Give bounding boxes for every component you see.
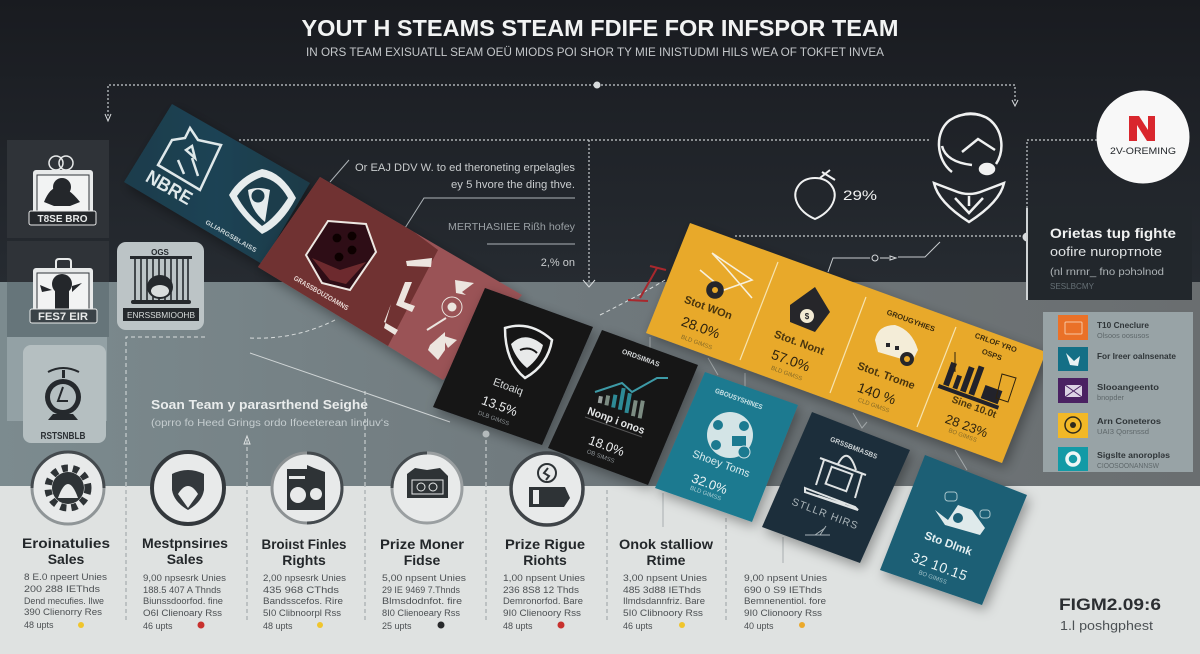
revenue column five: [503, 453, 586, 631]
card: red: GRASSBOUZOAMNS: [292, 275, 350, 312]
revenue column four: 29 IE 9469 7.Thnds: [382, 585, 460, 595]
card link lines: [650, 337, 967, 563]
revenue column seven: [744, 573, 828, 631]
revenue column six: Ilmdsdannfriz. Bare: [623, 596, 705, 606]
legend item two: [1058, 347, 1176, 371]
revenue column six: 3,00 npsent Unies: [623, 573, 708, 583]
revenue column five: Demronorfod. Bare: [503, 596, 583, 606]
card: black two: [548, 330, 698, 485]
revenue column four: 25 upts: [382, 621, 412, 631]
revenue column three: [262, 453, 347, 631]
revenue column one: [22, 452, 110, 630]
panel: left icon column: [7, 140, 204, 443]
revenue column two: Mestpnsirıes: [142, 535, 228, 551]
panel: icon tile three: RSTSNBLB: [40, 431, 86, 442]
icon: house money: $: [805, 312, 810, 321]
card: yellow: [646, 223, 1046, 463]
callout text block: [330, 160, 576, 269]
panel: icon tile one: [7, 140, 109, 238]
panel: right callout: [1026, 208, 1192, 300]
card: black two: ORDSIMIAS: [621, 349, 661, 369]
icon: house money: [790, 287, 830, 332]
legend item three: [1058, 378, 1159, 403]
revenue column four: Blmsdodnfot. fire: [382, 596, 462, 606]
card: teal two: Sto Dlmk: [923, 530, 974, 559]
total figure: [1059, 596, 1161, 633]
revenue column five: Riohts: [523, 552, 567, 568]
icon: mask: [934, 183, 1004, 222]
card: teal two: 32 10.15: [909, 549, 970, 584]
callout text block: Or EAJ DDV W. to ed theroneting erpelagles: [355, 162, 575, 174]
revenue column two: [142, 452, 228, 631]
legend item one: Olsoos oosusos: [1097, 333, 1150, 340]
revenue column six: 5I0 Clibnoory Rss: [623, 608, 704, 618]
icon: dragon shield: [505, 326, 552, 378]
card: black two: Nonp i onos: [586, 405, 646, 437]
panel: icon tile one: T8SE BRO: [38, 214, 88, 225]
card: teal two: [880, 455, 1027, 605]
card: blue: [124, 104, 310, 264]
node dot: [482, 430, 490, 438]
card: black one: [433, 288, 593, 445]
panel: right callout: Orietas tup fighte: [1050, 225, 1176, 241]
revenue column two: 46 upts: [143, 621, 173, 631]
revenue column six: [619, 536, 713, 631]
card: navy: GRSSBMIASBS: [829, 436, 878, 461]
icon: speakers: [272, 453, 342, 523]
icon: small head with percent: [795, 170, 877, 219]
revenue column one: 8 E.0 npeert Unies: [24, 572, 108, 582]
card: yellow: BLD GIMSS: [680, 335, 713, 351]
red arrow: [628, 266, 666, 301]
legend item four: Arn Coneteros: [1097, 416, 1161, 426]
section heading: (oprro fo Heed Grings ordo Ifoeeterean Iinduvʻs: [151, 417, 389, 429]
icon: crest: [158, 128, 221, 190]
callout text block: MERTHASIIEE Rißh hofey: [448, 221, 576, 233]
legend item three: Slooangeento: [1097, 382, 1159, 392]
icon: coin and wallet: [511, 453, 583, 525]
icon: headset helmet: [939, 114, 1001, 174]
revenue column three: Rights: [282, 552, 326, 568]
connector node: [872, 255, 896, 261]
card: yellow: BLD GIMSS: [770, 366, 803, 382]
revenue column five: 9I0 Clienoory Rss: [503, 608, 582, 618]
card: yellow: CLD GIMSS: [857, 398, 890, 415]
icon: shield: [152, 452, 224, 524]
legend item four: UAI3 Qorsnssd: [1097, 429, 1149, 436]
card: yellow: Stot. Nont: [772, 329, 826, 358]
card: yellow: Stot WOn: [682, 294, 734, 322]
card: navy: [762, 412, 910, 563]
revenue column five: Prize Rigue: [505, 536, 585, 552]
revenue column three: 48 upts: [263, 621, 293, 631]
logo badge: 2V-OREMING: [1110, 146, 1176, 157]
legend item four: [1058, 413, 1161, 438]
revenue column four: Fidse: [404, 552, 440, 568]
revenue column six: Onok stalliow: [619, 536, 713, 552]
panel: legend: [1043, 312, 1193, 472]
revenue column four: Prize Moner: [380, 536, 465, 552]
card: teal: BLD GIMSS: [689, 486, 722, 502]
icon: machine: [392, 453, 462, 523]
card: teal: 32.0%: [690, 470, 730, 497]
card: navy: STLLR HIRS: [790, 496, 860, 532]
legend item one: T10 Cneclure: [1097, 320, 1149, 330]
icon: vault building: [805, 456, 866, 510]
glyph marks: [384, 258, 474, 360]
card: black one: DLB GIMSS: [477, 411, 510, 427]
revenue column four: [380, 453, 467, 631]
panel: icon tile two: FES7 EIR: [38, 311, 88, 323]
card: yellow: 140 %: [855, 379, 898, 408]
revenue column five: 1,00 npsent Unies: [503, 573, 586, 583]
panel: cage tile: ENRSSBMIOOHB: [127, 310, 195, 320]
callout text block: 2,% on: [541, 257, 575, 269]
revenue column two: 188.5 407 A Thnds: [143, 585, 222, 595]
card: blue: GLIARGSBLAISS: [204, 219, 258, 255]
card: yellow: 28 23%: [943, 411, 990, 441]
card: teal: GBOUSYSHINES: [714, 388, 763, 412]
leader line: [250, 353, 450, 422]
connector arrowheads and nodes: [105, 82, 1031, 287]
icon: small head with percent: 29%: [843, 187, 877, 203]
legend item one: [1058, 315, 1150, 340]
revenue column three: Bandsscefos. Rire: [263, 596, 343, 606]
total figure: FIGM2.09:6: [1059, 596, 1161, 614]
revenue column four: 8I0 Clienoeary Rss: [382, 608, 460, 618]
revenue column two: O6I Clienoary Rss: [143, 608, 223, 618]
revenue column one: Dend mecufies. Ilwe: [24, 596, 104, 606]
revenue column three: Broiıst Finles: [262, 536, 347, 552]
revenue column five: 48 upts: [503, 621, 533, 631]
card: black one: 13.5%: [480, 392, 520, 419]
card: yellow: BO GIMSS: [947, 428, 977, 444]
panel: icon tile three: [7, 337, 107, 443]
revenue column seven: 690 0 S9 IEThds: [744, 585, 823, 595]
total figure: 1.l poshgphest: [1060, 618, 1153, 633]
icon: shield: [229, 169, 296, 234]
card: teal: [655, 372, 798, 522]
logo badge: [1096, 90, 1190, 184]
icon: wheel: [700, 253, 752, 298]
icon: gear: [32, 452, 104, 524]
title: YOUT H STEAMS STEAM FDIFE FOR INFSPOR TEAM: [302, 15, 898, 41]
panel: right callout: (nl rnrnr_ fno pɔhɔlnod: [1050, 266, 1164, 278]
chart: black bars: [938, 352, 1016, 410]
revenue column one: 200 288 IEThds: [24, 584, 101, 594]
revenue column two: Biunssdoorfod. fine: [143, 596, 223, 606]
card: yellow: Stot. Trome: [856, 360, 917, 392]
dashed section lines: [126, 280, 665, 486]
chart: rising bars: [595, 378, 668, 419]
panel: cage tile: [117, 242, 204, 330]
icon: coins and bubbles: [935, 492, 990, 535]
column divider lines on light ground: [126, 486, 726, 620]
callout text block: ey 5 hvore the ding thve.: [451, 179, 575, 191]
icon: die: [306, 221, 376, 290]
card: black one: Etoaiq: [491, 376, 525, 398]
card: yellow: Sine 10.0t: [950, 394, 998, 421]
panel: right callout: SESLBCMY: [1050, 281, 1094, 291]
panel: cage tile: OGS: [151, 248, 170, 257]
icon: bus: [875, 325, 918, 366]
revenue column two: 9,00 npsesrk Unies: [143, 573, 227, 583]
card: black two: 18.0%: [587, 432, 627, 459]
revenue column one: 48 upts: [24, 620, 54, 630]
section heading: Soan Team y parasrthend Seighe: [151, 397, 368, 412]
card: yellow: 57.0%: [769, 346, 812, 375]
revenue column four: 5,00 npsent Unies: [382, 573, 467, 583]
revenue column two: Sales: [167, 551, 204, 567]
revenue column three: 2,00 npsesrk Unies: [263, 573, 347, 583]
revenue column one: Eroinatulies: [22, 535, 110, 551]
revenue column one: 390 Clienorry Res: [24, 607, 103, 617]
panel: right callout: oofire nuropтnote: [1050, 245, 1162, 259]
legend item three: bnopder: [1097, 395, 1125, 402]
card label: NBRE: [142, 167, 196, 210]
revenue column six: 46 upts: [623, 621, 653, 631]
leader with node: [828, 242, 940, 272]
legend item two: For Ireer oalnsenate: [1097, 351, 1176, 361]
column dividers: [740, 262, 956, 427]
revenue column seven: 40 upts: [744, 621, 774, 631]
card: teal two: BO GIMSS: [917, 570, 947, 586]
revenue column seven: Bemnenentiol. fore: [744, 596, 826, 606]
legend item five: Sigslte anoropləs: [1097, 450, 1170, 460]
panel: icon tile two: [7, 241, 109, 337]
revenue column one: Sales: [48, 551, 85, 567]
revenue column three: 5I0 Clibnoorpl Rss: [263, 608, 342, 618]
revenue column seven: 9I0 Clionoory Rss: [744, 608, 823, 618]
card: yellow: 28.0%: [679, 313, 722, 342]
legend item five: CIOOSOONANNSW: [1097, 463, 1159, 470]
legend item five: [1058, 447, 1170, 471]
card: yellow: CRLOF YRO: [974, 331, 1018, 354]
revenue column seven: 9,00 npsent Unies: [744, 573, 828, 583]
card: yellow: GROUGYHIES: [885, 308, 936, 334]
card: red: [258, 177, 522, 380]
icon: coin orb: [707, 412, 753, 458]
revenue column five: 236 8S8 12 Thds: [503, 585, 580, 595]
revenue column six: Rtime: [647, 552, 686, 568]
revenue column three: 435 968 CThds: [263, 585, 340, 595]
section heading: [151, 397, 389, 429]
dotted connector lines: [108, 85, 1100, 300]
subtitle: IN ORS TEAM EXISUATLL SEAM OEÜ MIODS POI SHOR TY MIE INISTUDMI HILS WEA OF TOKFET INVEA: [306, 47, 884, 59]
arrow up: [244, 436, 250, 444]
card: black two: OB SIMSS: [586, 449, 615, 465]
revenue column six: 485 3d88 IEThds: [623, 585, 702, 595]
card: teal: Shoey Toms: [691, 448, 752, 480]
card: yellow: OSPS: [981, 347, 1003, 362]
